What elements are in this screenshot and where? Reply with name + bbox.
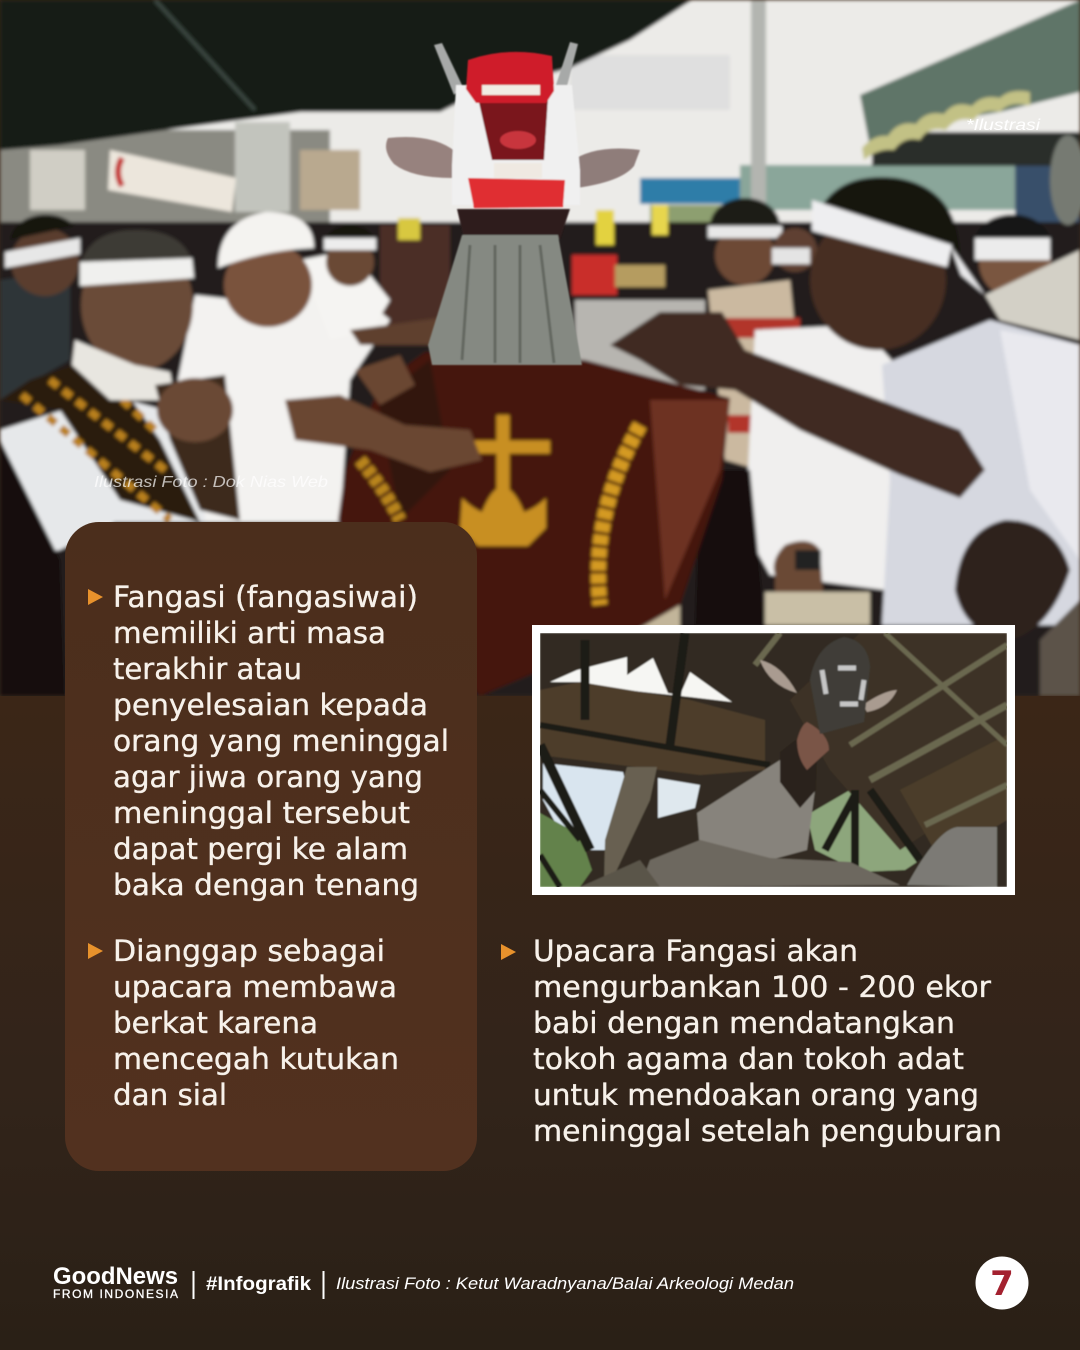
text block: sacrifice description: meninggal setelah penguburan xyxy=(533,1114,1002,1148)
text block: blessing xyxy=(113,934,399,1112)
footer logo: GoodNews xyxy=(53,1263,178,1290)
text block: sacrifice description xyxy=(533,934,1002,1148)
panel: left brown card xyxy=(65,522,477,1171)
text block: meaning of Fangasi: penyelesaian kepada xyxy=(113,688,428,722)
men on left xyxy=(0,270,70,400)
text block: blessing: upacara membawa xyxy=(113,970,397,1004)
right man xyxy=(882,320,1080,625)
page number badge: 7 xyxy=(990,1264,1014,1304)
page number badge xyxy=(976,1256,1028,1310)
footer hashtag: #Infografik xyxy=(206,1274,311,1295)
text block: meaning of Fangasi xyxy=(113,580,449,902)
text block: sacrifice description: babi dengan mendatangkan xyxy=(533,1006,955,1040)
bullet icon 1 xyxy=(88,589,103,605)
illustration note: *Ilustrasi xyxy=(966,117,1041,134)
text block: meaning of Fangasi: orang yang meninggal xyxy=(113,724,449,758)
text block: blessing: dan sial xyxy=(113,1078,227,1112)
horse mask xyxy=(386,42,640,365)
text block: sacrifice description: Upacara Fangasi akan xyxy=(533,934,858,968)
text block: sacrifice description: mengurbankan 100 - 200 ekor xyxy=(533,970,991,1004)
text block: blessing: berkat karena xyxy=(113,1006,318,1040)
footer photo credit: Ilustrasi Foto : Ketut Waradnyana/Balai Arkeologi Medan xyxy=(336,1274,794,1293)
text block: meaning of Fangasi: baka dengan tenang xyxy=(113,868,419,902)
text block: meaning of Fangasi: agar jiwa orang yang xyxy=(113,760,423,794)
bullet icon 2 xyxy=(88,943,103,959)
costume body xyxy=(338,352,730,696)
text block: blessing: Dianggap sebagai xyxy=(113,934,385,968)
text block: sacrifice description: tokoh agama dan tokoh adat xyxy=(533,1042,964,1076)
footer logo: FROM INDONESIA xyxy=(53,1287,178,1301)
text block: meaning of Fangasi: memiliki arti masa xyxy=(113,616,386,650)
photo credit caption: Ilustrasi Foto : Dok Nias Web xyxy=(94,474,328,491)
inset photo: carved wooden horse under thatched roof xyxy=(532,625,1015,895)
bullet icon 3 xyxy=(501,944,516,960)
text block: meaning of Fangasi: Fangasi (fangasiwai) xyxy=(113,580,418,614)
text block: sacrifice description: untuk mendoakan orang yang xyxy=(533,1078,979,1112)
second man's arm xyxy=(285,395,482,472)
hero photo: Fangasi ceremony crowd with horse mask xyxy=(0,0,1080,696)
text block: meaning of Fangasi: meninggal tersebut xyxy=(113,796,410,830)
text block: meaning of Fangasi: dapat pergi ke alam xyxy=(113,832,408,866)
text block: blessing: mencegah kutukan xyxy=(113,1042,399,1076)
text block: meaning of Fangasi: terakhir atau xyxy=(113,652,302,686)
